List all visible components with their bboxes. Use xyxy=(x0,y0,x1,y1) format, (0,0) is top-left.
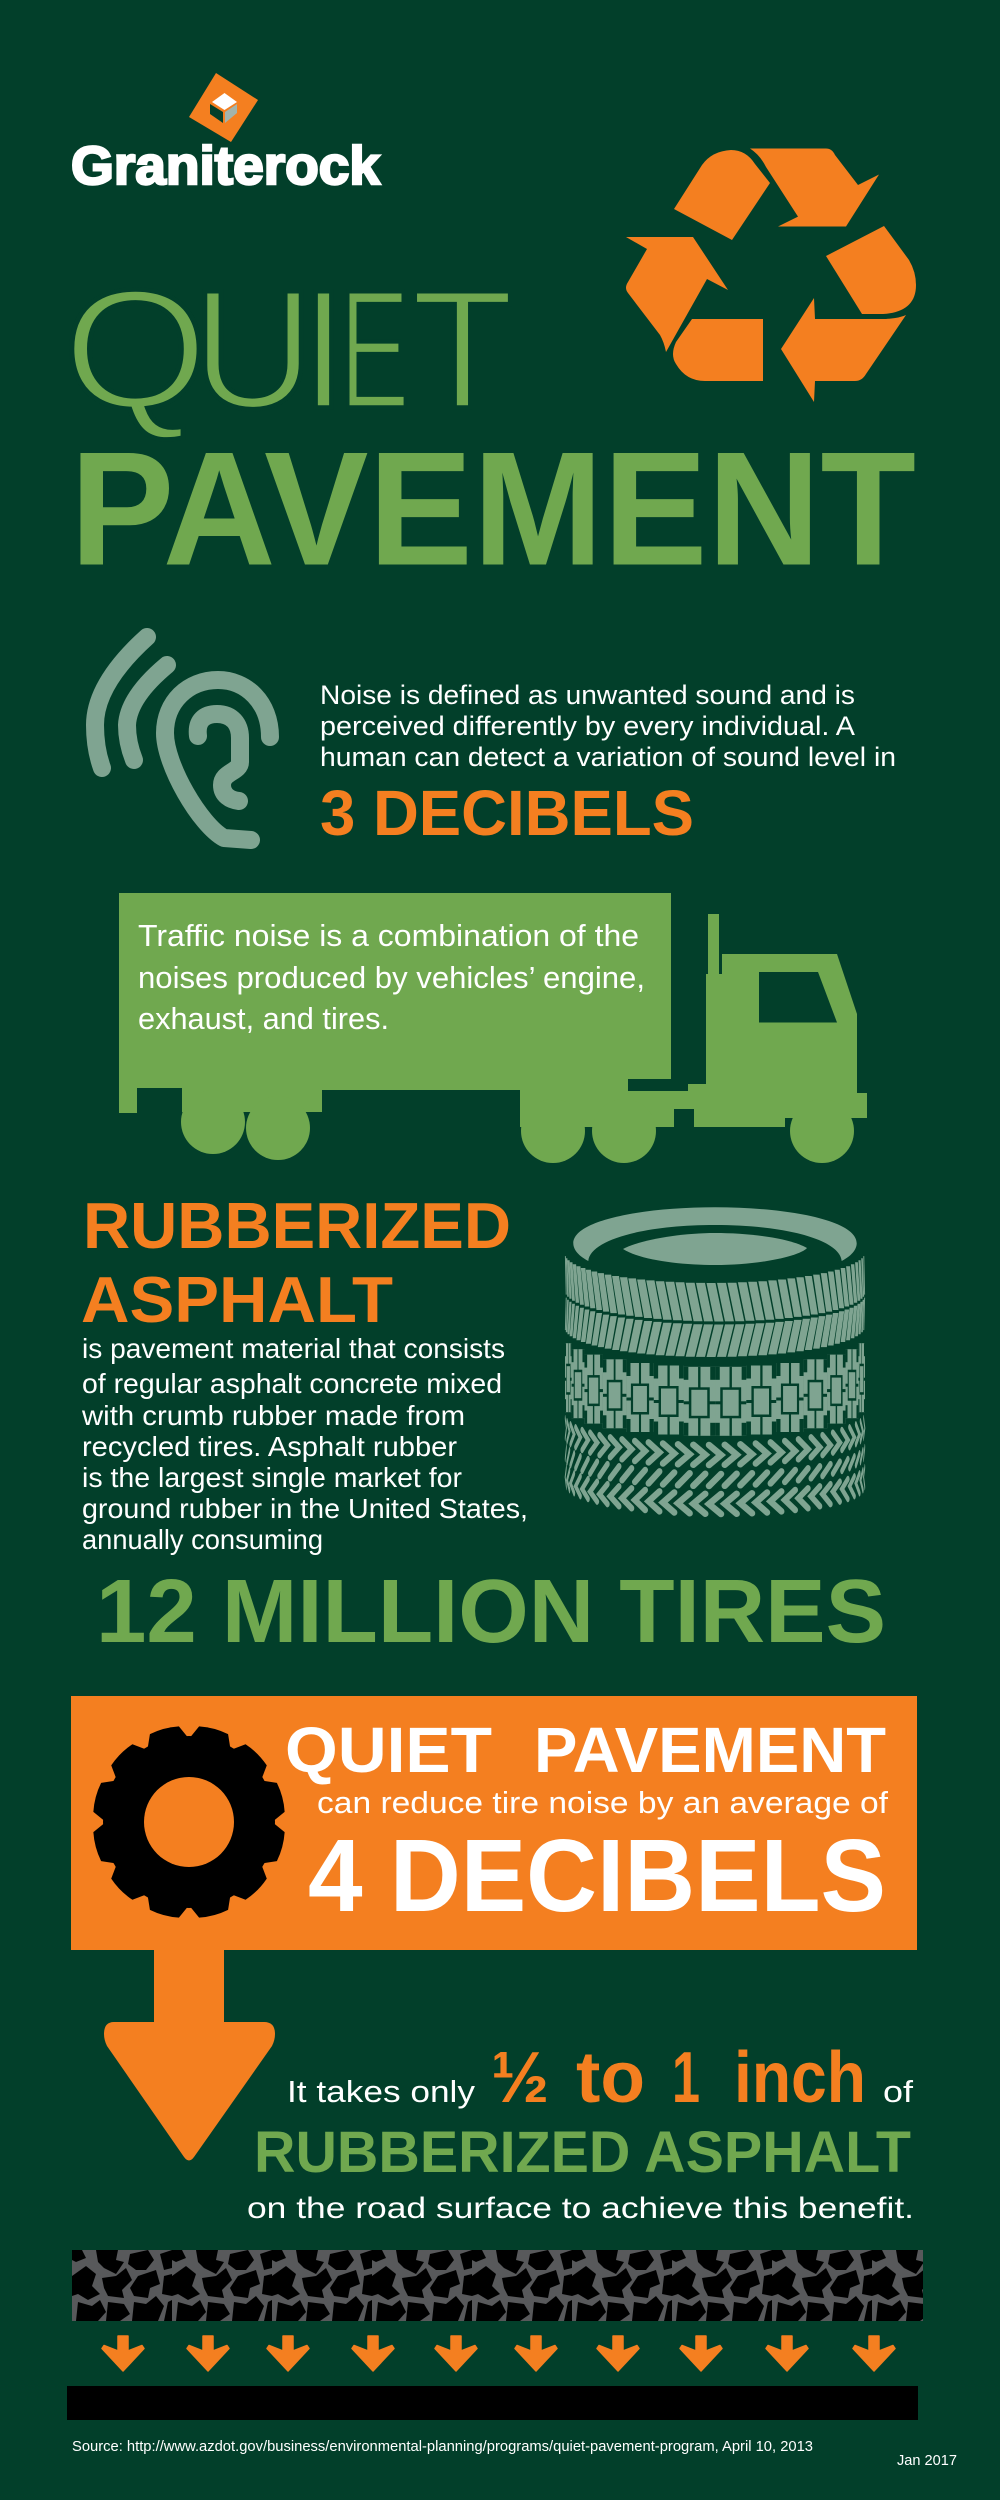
black road base bar xyxy=(67,2386,918,2420)
truck silhouette xyxy=(119,893,867,1163)
text: it takes only: It takes only xyxy=(287,2074,476,2109)
panel: quiet pavement orange box with arrow xyxy=(71,1696,917,2160)
date: Jan 2017 xyxy=(897,2452,957,2469)
text block: rubberized asphalt description: ground rubber in the United States, xyxy=(82,1493,528,1524)
text block: noise definition: perceived differently by every individual. A xyxy=(320,711,855,741)
callout: 4 decibels: 4 DECIBELS xyxy=(308,1818,886,1933)
text: half to 1 inch: 1 xyxy=(672,2038,700,2118)
title: QUIET: Q xyxy=(63,254,208,444)
heading: rubberized asphalt: ASPHALT xyxy=(81,1263,393,1336)
panel heading: quiet pavement: QUIET xyxy=(285,1714,492,1786)
icon: orange diamond with cube xyxy=(189,73,258,142)
title: QUIET: U xyxy=(192,254,314,444)
text block: noise definition: human can detect a variation of sound level in xyxy=(320,742,896,772)
icon: stack of tires xyxy=(565,1207,865,1514)
text: half to 1 inch: to xyxy=(576,2038,645,2118)
text block: traffic noise xyxy=(138,918,645,1036)
icon: gear xyxy=(80,1713,298,1931)
arrow down from panel xyxy=(104,1945,275,2160)
text: half to 1 inch: inch xyxy=(734,2038,866,2118)
logo: Graniterock xyxy=(71,73,381,196)
text: half to 1 inch xyxy=(491,2038,866,2118)
source citation: Source: http://www.azdot.gov/business/environmental-planning/programs/quiet-pavement-program, April 10, 2013 xyxy=(72,2439,813,2455)
text: of: of xyxy=(883,2074,913,2109)
rubberized asphalt layer strip xyxy=(72,2250,923,2321)
top tire ring and hole xyxy=(573,1207,857,1265)
text block: rubberized asphalt description: recycled tires. Asphalt rubber xyxy=(82,1431,457,1462)
text block: rubberized asphalt description: of regular asphalt concrete mixed xyxy=(82,1368,502,1399)
heading: rubberized asphalt: RUBBERIZED xyxy=(83,1189,511,1262)
panel heading: quiet pavement xyxy=(285,1714,886,1786)
text: half to 1 inch: ½ xyxy=(491,2038,549,2118)
bottom tire chevrons xyxy=(565,1418,865,1514)
text block: traffic noise: noises produced by vehicles’ engine, xyxy=(138,960,645,995)
title: QUIET: T xyxy=(411,254,514,444)
logo wordmark: Graniterock xyxy=(71,136,381,196)
text block: half to one inch xyxy=(247,2038,914,2225)
text block: noise definition: Noise is defined as unwanted sound and is xyxy=(320,680,855,710)
title: QUIET: I xyxy=(300,254,347,444)
icon: ear with sound waves xyxy=(95,637,270,840)
illustration: truck with text xyxy=(119,893,867,1163)
text block: rubberized asphalt description: annually consuming xyxy=(82,1524,323,1555)
title: QUIET: E xyxy=(340,254,410,444)
orange panel background xyxy=(71,1696,917,1950)
text block: traffic noise: Traffic noise is a combination of the xyxy=(138,918,639,953)
text block: noise definition xyxy=(320,680,896,772)
text block: rubberized asphalt description: is pavement material that consists xyxy=(82,1333,505,1364)
panel heading: quiet pavement: PAVEMENT xyxy=(534,1714,886,1786)
row of orange arrows xyxy=(102,2336,895,2371)
text: rubberized asphalt: RUBBERIZED ASPHALT xyxy=(254,2120,911,2185)
text block: rubberized asphalt description: is the largest single market for xyxy=(82,1462,462,1493)
panel subtext: can reduce tire noise by an average of xyxy=(317,1785,888,1820)
callout: 3 decibels: 3 DECIBELS xyxy=(320,777,694,849)
text: road surface: on the road surface to achieve this benefit. xyxy=(247,2192,914,2225)
text block: traffic noise: exhaust, and tires. xyxy=(138,1001,389,1036)
text block: rubberized asphalt description xyxy=(81,1333,528,1555)
callout: 12 million tires: 12 MILLION TIRES xyxy=(96,1562,886,1662)
text block: rubberized asphalt description: with crumb rubber made from xyxy=(81,1400,465,1431)
top tire ribs xyxy=(565,1256,865,1357)
title: PAVEMENT: PAVEMENT xyxy=(70,418,916,600)
middle tire blocks xyxy=(565,1343,865,1436)
title xyxy=(63,254,916,600)
heading: rubberized asphalt xyxy=(81,1189,511,1336)
icon: recycling symbol xyxy=(626,148,916,402)
